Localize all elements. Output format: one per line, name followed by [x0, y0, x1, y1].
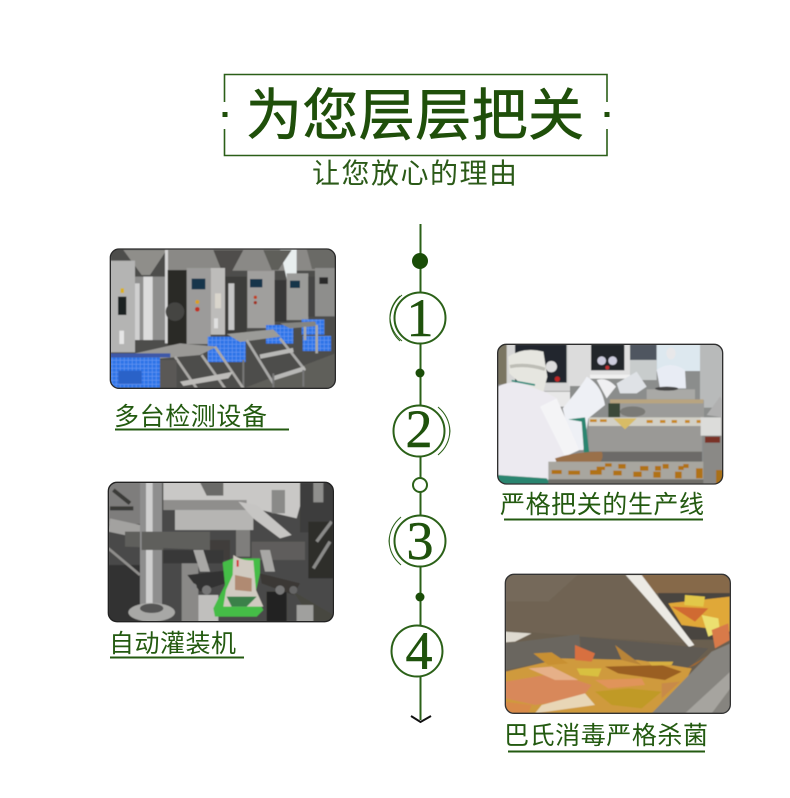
open dot: [413, 478, 427, 492]
timeline line: [420, 224, 422, 720]
step 2: [394, 399, 450, 459]
caption: filling machine: 自动灌装机: [109, 630, 236, 658]
frame dots: [222, 112, 610, 117]
dot: [416, 368, 424, 378]
subtitle: 让您放心的理由: [312, 158, 517, 189]
main title: 为您层层把关: [246, 84, 584, 147]
caption: production line: 严格把关的生产线: [500, 491, 704, 519]
arrow head: [411, 716, 431, 722]
step 3: [389, 511, 446, 571]
title block: [222, 74, 610, 189]
photo: production line: [498, 344, 723, 484]
dot: [412, 253, 428, 269]
photo: detection equipment: [110, 249, 335, 388]
step 2: 2: [406, 399, 432, 459]
caption: pasteurization: 巴氏消毒严格杀菌: [504, 722, 708, 750]
caption: detection equipment: 多台检测设备: [114, 403, 267, 431]
step 4: [392, 621, 442, 681]
step 4: 4: [406, 621, 432, 681]
step 1: [390, 288, 446, 348]
step 1: 1: [406, 288, 434, 348]
dot: [416, 592, 424, 602]
timeline: [389, 224, 450, 722]
photo: pasteurization: [505, 574, 730, 713]
title frame: [224, 74, 607, 156]
photo: filling machine: [108, 482, 333, 622]
step 3: 3: [406, 511, 434, 571]
